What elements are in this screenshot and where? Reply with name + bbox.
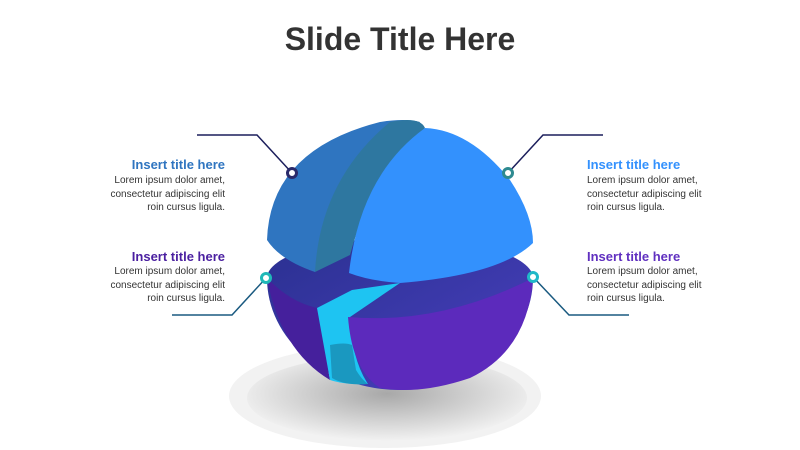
body: top-left: consectetur adipiscing elit — [110, 188, 225, 200]
top caps — [267, 120, 533, 283]
dots — [262, 168, 538, 282]
shadow — [229, 344, 541, 448]
body: bottom-left: Lorem ipsum dolor amet, — [114, 266, 225, 277]
body: top-left: roin cursus ligula. — [147, 202, 225, 213]
body: bottom-left: roin cursus ligula. — [147, 293, 225, 304]
body: bottom-right: Lorem ipsum dolor amet, — [587, 266, 698, 277]
body: top-right: consectetur adipiscing elit — [587, 188, 702, 200]
text: bottom-left: Insert title here — [132, 249, 225, 264]
body: top-right — [587, 175, 702, 213]
body: top-right: roin cursus ligula. — [587, 202, 665, 213]
body: bottom-left — [110, 266, 225, 304]
text: bottom-right: Insert title here — [587, 249, 680, 264]
body: top-left — [110, 175, 225, 213]
body: top-left: Lorem ipsum dolor amet, — [114, 175, 225, 186]
connector lines — [172, 135, 629, 315]
bottom hemisphere — [267, 238, 533, 390]
text: top-left: Insert title here — [132, 157, 225, 172]
body: top-right: Lorem ipsum dolor amet, — [587, 175, 698, 186]
text: top-right: Insert title here — [587, 157, 680, 172]
body: bottom-right — [587, 266, 702, 304]
body: bottom-right: consectetur adipiscing elit — [587, 280, 702, 290]
title: Slide Title Here — [285, 21, 515, 57]
body: bottom-left: consectetur adipiscing elit — [110, 280, 225, 290]
body: bottom-right: roin cursus ligula. — [587, 293, 665, 304]
